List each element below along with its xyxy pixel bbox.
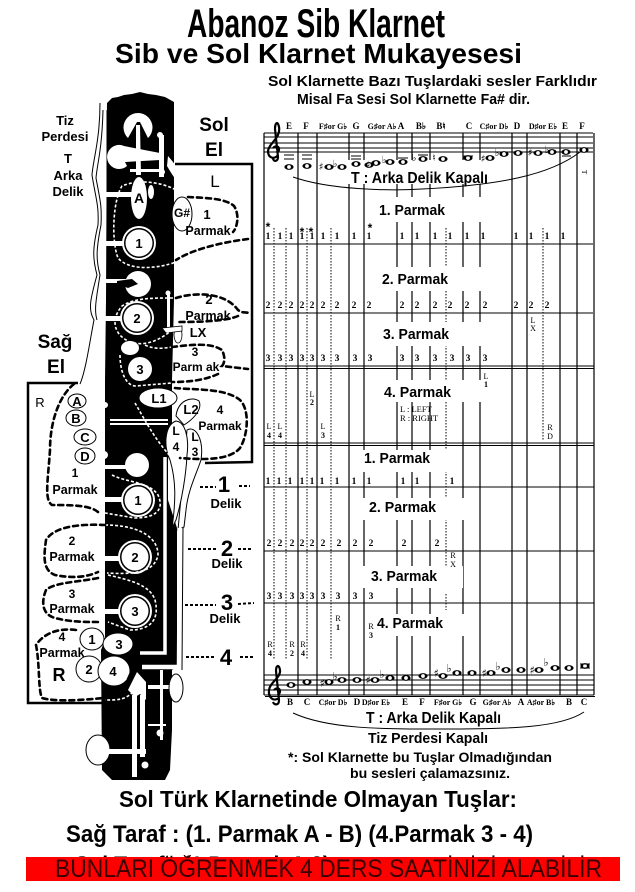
bottom notes: ♭ bbox=[543, 656, 549, 669]
key G# bbox=[172, 197, 192, 231]
left/right legend bbox=[400, 404, 439, 423]
diagram labels: Delik bbox=[52, 184, 84, 199]
bottom note names: A♯or B♭ bbox=[527, 698, 555, 707]
diagram labels bbox=[35, 113, 242, 685]
stacked key marks: R bbox=[368, 622, 374, 631]
bottom note names: E bbox=[402, 697, 408, 707]
footnote bbox=[288, 749, 552, 781]
stacked key marks: 3 bbox=[321, 431, 325, 440]
note text: Sol Klarnette Bazı Tuşlardaki sesler Farklıdır bbox=[268, 73, 597, 90]
label gaps bbox=[345, 160, 495, 636]
row label left 1: 1. Parmak bbox=[379, 202, 446, 219]
left/right legend: R : RIGHT bbox=[400, 413, 439, 423]
top note names: E bbox=[562, 121, 568, 131]
key L3: 3 bbox=[192, 445, 199, 459]
key L2: L2 bbox=[183, 402, 199, 417]
bottom note names: C bbox=[304, 697, 310, 707]
fingering chart bbox=[264, 121, 595, 729]
bottom note names: C bbox=[581, 697, 587, 707]
diagram labels: Parmak bbox=[185, 224, 231, 238]
arka delik label top: T : Arka Delik Kapalı bbox=[351, 170, 488, 187]
stacked key marks: L bbox=[321, 422, 326, 431]
bottom notes: ♯ bbox=[433, 667, 439, 680]
stacked key marks bbox=[267, 316, 553, 658]
key L4 bbox=[166, 421, 188, 528]
top notes: ♯ bbox=[528, 148, 532, 159]
top note names: B♭ bbox=[416, 121, 426, 131]
hole labels: 1 bbox=[218, 472, 230, 497]
top notes: ♭ bbox=[495, 148, 500, 159]
hole labels: 3 bbox=[221, 590, 233, 615]
fingering digits bbox=[266, 232, 566, 602]
top note names: F bbox=[579, 121, 585, 131]
stacked key marks: L bbox=[531, 316, 536, 325]
diagram labels: 2 bbox=[69, 534, 76, 548]
row label left 2: 2. Parmak bbox=[382, 271, 449, 288]
diagram labels: Parmak bbox=[39, 646, 85, 660]
top note names: C bbox=[466, 121, 472, 131]
key L4: L bbox=[172, 424, 180, 438]
hole labels: 4 bbox=[220, 645, 233, 670]
stacked key marks: R bbox=[547, 423, 553, 432]
diagram labels: 1 bbox=[203, 207, 211, 222]
lever LX bbox=[162, 326, 182, 343]
treble clef top bbox=[268, 123, 279, 161]
key ring 1 lower bbox=[100, 483, 155, 517]
asterisks: * bbox=[309, 225, 314, 239]
hole labels: Delik bbox=[211, 556, 243, 571]
top notes: ♭ bbox=[412, 153, 417, 164]
bottom notes: ♯ bbox=[481, 667, 487, 680]
note text: Misal Fa Sesi Sol Klarnette Fa# dir. bbox=[297, 91, 530, 108]
stacked key marks: 4 bbox=[301, 649, 305, 658]
diagram labels: Parmak bbox=[49, 602, 95, 616]
stacked key marks: X bbox=[450, 560, 456, 569]
diagram labels: Parmak bbox=[198, 419, 242, 433]
side keys A B C D: C bbox=[80, 430, 90, 445]
bottom note names: B bbox=[287, 697, 293, 707]
little-finger keys right: 4 bbox=[109, 664, 117, 679]
row label left 4: 4. Parmak bbox=[384, 384, 452, 401]
diagram labels: L bbox=[210, 172, 220, 191]
left/right legend: L : LEFT bbox=[400, 404, 433, 414]
stacked key marks: R bbox=[335, 614, 341, 623]
bottom note names: G bbox=[469, 697, 477, 707]
long rods bbox=[140, 457, 183, 670]
stacked key marks: 1 bbox=[336, 623, 340, 632]
lower tone hole bbox=[100, 402, 149, 477]
hole labels: Delik bbox=[209, 611, 241, 626]
stacked key marks: X bbox=[530, 324, 536, 333]
little-finger keys right: 3 bbox=[115, 637, 123, 652]
stacked key marks: L bbox=[484, 372, 489, 381]
stacked key marks: 4 bbox=[268, 649, 272, 658]
diagram labels: 3 bbox=[192, 345, 199, 359]
fingering digits: 333333333333333 bbox=[266, 354, 488, 364]
clarinet diagram bbox=[28, 92, 252, 780]
stacked key marks: R bbox=[289, 640, 295, 649]
top notes: ♭ bbox=[382, 155, 387, 166]
diagram labels: 2 bbox=[205, 292, 213, 307]
row label right 3: 3. Parmak bbox=[371, 568, 438, 585]
diagram labels: 4 bbox=[59, 630, 66, 644]
top notes: ♯ bbox=[319, 162, 323, 173]
key ring 1 upper: 1 bbox=[135, 236, 143, 251]
side keys A B C D: D bbox=[80, 449, 90, 464]
key L2 bbox=[176, 399, 200, 425]
bottom arc bbox=[293, 712, 584, 729]
bottom note names: C♯or D♭ bbox=[319, 698, 348, 707]
key ring 1 upper bbox=[122, 226, 156, 260]
diagram labels: Sağ bbox=[38, 332, 72, 353]
top note names: B♮ bbox=[436, 121, 446, 131]
key L4: 4 bbox=[173, 440, 180, 454]
bottom note names bbox=[287, 697, 587, 707]
key ring 2 lower bbox=[100, 540, 152, 574]
diagram labels: Parm ak bbox=[173, 360, 220, 374]
fingering digits: 111111111111 bbox=[266, 477, 455, 487]
footnote: bu sesleri çalamazsınız. bbox=[350, 765, 510, 781]
bottom note names: A bbox=[518, 697, 525, 707]
key L3 bbox=[178, 429, 202, 530]
side keys A B C D: B bbox=[71, 411, 81, 426]
row label right 1: 1. Parmak bbox=[364, 450, 431, 467]
diagram labels: Parmak bbox=[49, 550, 95, 564]
top notes: ♭ bbox=[545, 145, 550, 156]
treble clef bottom bbox=[269, 666, 280, 704]
arka delik label bottom: T : Arka Delik Kapalı bbox=[366, 710, 501, 727]
top note names: D♯or E♭ bbox=[529, 122, 557, 131]
bottom notes: ♭ bbox=[495, 660, 501, 673]
top note names: G bbox=[352, 121, 360, 131]
bottom notes: ♭ bbox=[332, 670, 338, 683]
diagram labels: Sol bbox=[199, 115, 229, 136]
top note names: A bbox=[398, 121, 405, 131]
fingering digits: 1111111111111111111 bbox=[266, 232, 566, 242]
diagram labels: El bbox=[47, 357, 65, 378]
key L1: L1 bbox=[151, 391, 167, 406]
bottom note names: D♯or E♭ bbox=[362, 698, 390, 707]
diagram labels: 1 bbox=[72, 466, 79, 480]
right side keys line: Sağ Taraf : (1. Parmak A - B) (4.Parmak 3 - 4) bbox=[66, 821, 533, 848]
top note names: E bbox=[286, 121, 292, 131]
asterisks: * bbox=[368, 221, 373, 235]
hole labels: Delik bbox=[210, 496, 242, 511]
diagram labels: 4 bbox=[217, 403, 224, 417]
side keys A B C D bbox=[66, 394, 96, 464]
subtitle: Sib ve Sol Klarnet Mukayesesi bbox=[115, 38, 522, 69]
bottom notes: ♯ bbox=[319, 677, 325, 690]
foot rods and thumb keys bbox=[86, 670, 183, 777]
top note names: F bbox=[303, 121, 309, 131]
T label beside top F: T bbox=[580, 170, 588, 175]
key L3: L bbox=[191, 430, 199, 444]
fingering digits: 22222222222 bbox=[267, 539, 440, 549]
stacked key marks: R bbox=[267, 640, 273, 649]
key ring 2 upper: 2 bbox=[133, 311, 141, 326]
little-finger keys right: 1 bbox=[88, 632, 96, 647]
L box bbox=[175, 164, 252, 463]
key G#: G# bbox=[174, 206, 190, 220]
diagram labels: Tiz bbox=[56, 113, 74, 128]
diagram labels: LX bbox=[190, 325, 207, 340]
key ring 3 lower: 3 bbox=[131, 604, 139, 619]
hole labels bbox=[185, 472, 254, 670]
diagram labels: R bbox=[35, 395, 45, 410]
key A: A bbox=[134, 190, 144, 206]
bottom notes: ♭ bbox=[446, 662, 452, 675]
key ring 1 lower: 1 bbox=[134, 493, 142, 508]
key L1 bbox=[139, 388, 177, 408]
tiz perdesi label: Tiz Perdesi Kapalı bbox=[368, 730, 488, 747]
bottom notes: ♯ bbox=[365, 674, 371, 687]
stacked key marks: L bbox=[267, 422, 272, 431]
top note names: F♯or G♭ bbox=[319, 122, 347, 131]
bottom note names: D bbox=[354, 697, 361, 707]
footnote: *: Sol Klarnette bu Tuşlar Olmadığından bbox=[288, 749, 552, 765]
stacked key marks: 2 bbox=[290, 649, 294, 658]
bottom staff fill bbox=[265, 696, 595, 697]
black dashed finger guides bbox=[36, 197, 250, 700]
fingering digits: 333333333 bbox=[267, 592, 374, 602]
key ring 2 upper bbox=[120, 301, 154, 335]
stacked key marks: 3 bbox=[369, 631, 373, 640]
bottom note names: B bbox=[566, 697, 572, 707]
stacked key marks: 4 bbox=[267, 431, 271, 440]
bottom note names: F♯or G♭ bbox=[434, 698, 462, 707]
top notes: ♯ bbox=[366, 160, 370, 171]
title: Abanoz Sib Klarnet bbox=[187, 2, 445, 46]
row label left 3: 3. Parmak bbox=[383, 326, 450, 343]
bottom notes: ♯ bbox=[529, 664, 535, 677]
top note names: G♯or A♭ bbox=[368, 122, 397, 131]
fingering digits: 222222222222222222 bbox=[266, 301, 550, 311]
stacked key marks: 2 bbox=[310, 398, 314, 407]
diagram labels: T bbox=[64, 151, 72, 166]
key ring 3 lower bbox=[100, 594, 152, 628]
top notes: ♭ bbox=[333, 159, 338, 170]
diagram labels: R bbox=[52, 665, 66, 685]
stacked key marks: L bbox=[278, 422, 283, 431]
bridge band bbox=[110, 419, 168, 425]
little-finger keys right: 2 bbox=[85, 662, 93, 677]
diagram labels: 3 bbox=[69, 587, 76, 601]
bottom notes: ♭ bbox=[379, 668, 385, 681]
top arc bbox=[293, 152, 580, 190]
top note names: C♯or D♭ bbox=[480, 122, 509, 131]
top notes: ♮ bbox=[432, 153, 436, 164]
little-finger keys right bbox=[76, 628, 133, 686]
asterisks: * bbox=[300, 225, 305, 239]
chart grid bbox=[264, 133, 594, 695]
asterisks: * bbox=[266, 220, 271, 234]
stacked key marks: 1 bbox=[484, 380, 488, 389]
diagram labels: Perdesi bbox=[42, 129, 88, 144]
key 3 upper bbox=[128, 357, 152, 381]
row label right 2: 2. Parmak bbox=[369, 499, 437, 516]
diagram labels: Parmak bbox=[52, 483, 98, 497]
bottom notes bbox=[286, 656, 590, 690]
stacked key marks: R bbox=[450, 551, 456, 560]
stacked key marks: L bbox=[310, 390, 315, 399]
R box bbox=[28, 383, 102, 703]
left side keys line hidden by banner: Sol Taraf : (1.Parmak A 3) bbox=[75, 852, 330, 879]
diagram labels: Arka bbox=[54, 168, 83, 183]
top notes: ♯ bbox=[481, 154, 485, 165]
side keys A B C D: A bbox=[72, 394, 82, 409]
stacked key marks: D bbox=[547, 432, 553, 441]
note text bbox=[268, 73, 597, 108]
asterisks bbox=[266, 220, 373, 239]
stacked key marks: R bbox=[300, 640, 306, 649]
hole labels: 2 bbox=[221, 536, 233, 561]
upper tone holes bbox=[100, 113, 191, 355]
bottom heading: Sol Türk Klarnetinde Olmayan Tuşlar: bbox=[119, 786, 517, 812]
diagram labels: El bbox=[205, 140, 223, 161]
top note names bbox=[286, 121, 585, 131]
key 3 upper: 3 bbox=[136, 362, 144, 377]
row label right 4: 4. Parmak bbox=[377, 615, 444, 632]
key ring 2 lower: 2 bbox=[131, 550, 139, 565]
top note names: D bbox=[514, 121, 521, 131]
diagram labels: Parmak bbox=[185, 309, 231, 323]
stacked key marks: 4 bbox=[278, 431, 282, 440]
bottom note names: G♯or A♭ bbox=[483, 698, 512, 707]
top notes bbox=[284, 145, 589, 173]
bottom note names: F bbox=[419, 697, 425, 707]
white dashed finger guides on body bbox=[105, 182, 188, 700]
